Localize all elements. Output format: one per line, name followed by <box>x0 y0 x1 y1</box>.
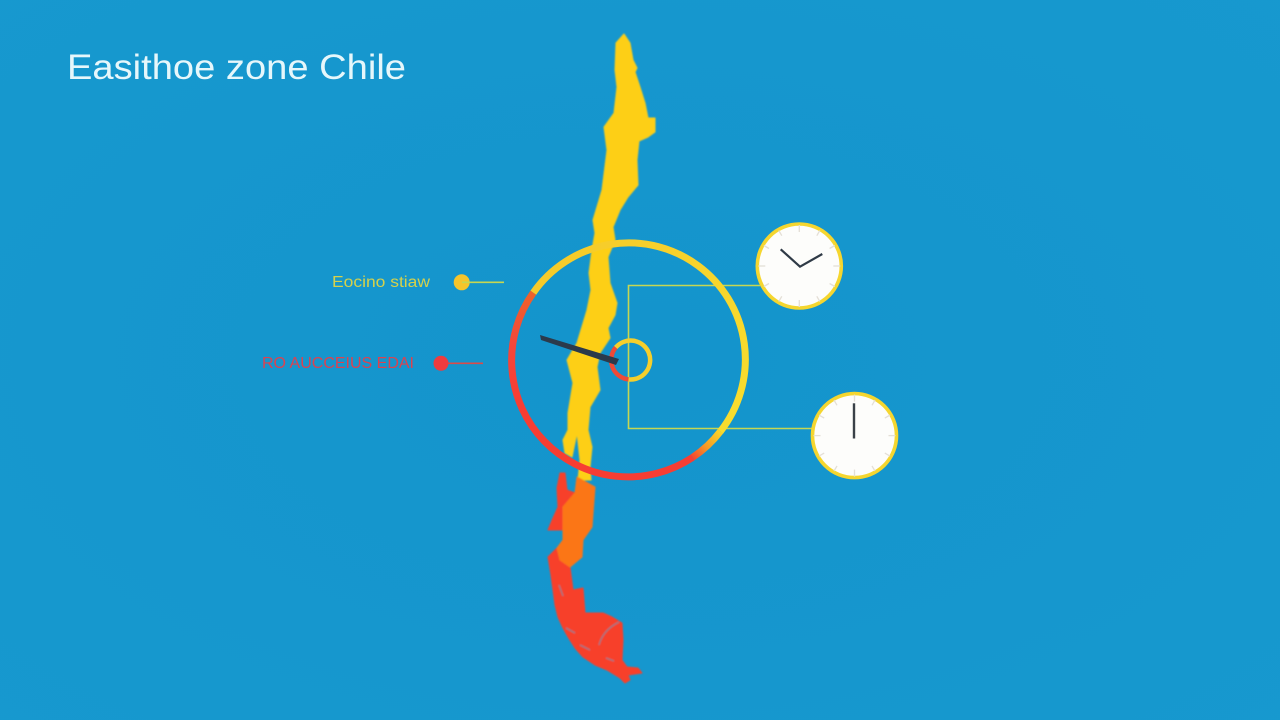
map: central orange zone <box>557 477 595 567</box>
clock face: top <box>757 224 841 308</box>
title: Easithoe zone Chile <box>67 48 406 87</box>
clock: top <box>757 224 841 308</box>
small ring: yellow arc <box>616 341 650 380</box>
ring: orange transition <box>693 431 720 457</box>
clock: bottom <box>812 394 896 478</box>
map of Chile <box>548 34 655 683</box>
dark pointer needle <box>540 335 619 365</box>
map: Patagonia red zone <box>548 548 642 683</box>
map: Patagonia fjord details <box>559 585 619 661</box>
clock hand: bottom <box>853 403 855 438</box>
legend label: red: RO AUCCEIUS EDAI <box>262 355 414 372</box>
legend label: yellow: Eocino stiaw <box>332 274 431 291</box>
ring: red arc <box>512 293 693 477</box>
legend: red zone <box>262 355 483 372</box>
legend line: yellow <box>462 281 504 283</box>
small center ring <box>611 341 650 380</box>
map: northern yellow zone <box>563 34 655 480</box>
clock ticks: bottom <box>814 395 896 477</box>
ring: yellow arc <box>533 243 745 431</box>
legend dot: yellow <box>454 274 470 290</box>
legend: yellow zone <box>332 274 504 291</box>
legend line: red <box>441 362 483 364</box>
clock ticks: top <box>758 225 840 307</box>
connector lines to clocks <box>628 286 813 428</box>
clock hands: top <box>781 249 822 267</box>
large time zone ring <box>512 243 745 477</box>
map: southern red zone <box>548 473 575 530</box>
legend dot: red <box>434 356 448 371</box>
small ring: red arc <box>611 348 628 379</box>
clock face: bottom <box>812 394 896 478</box>
